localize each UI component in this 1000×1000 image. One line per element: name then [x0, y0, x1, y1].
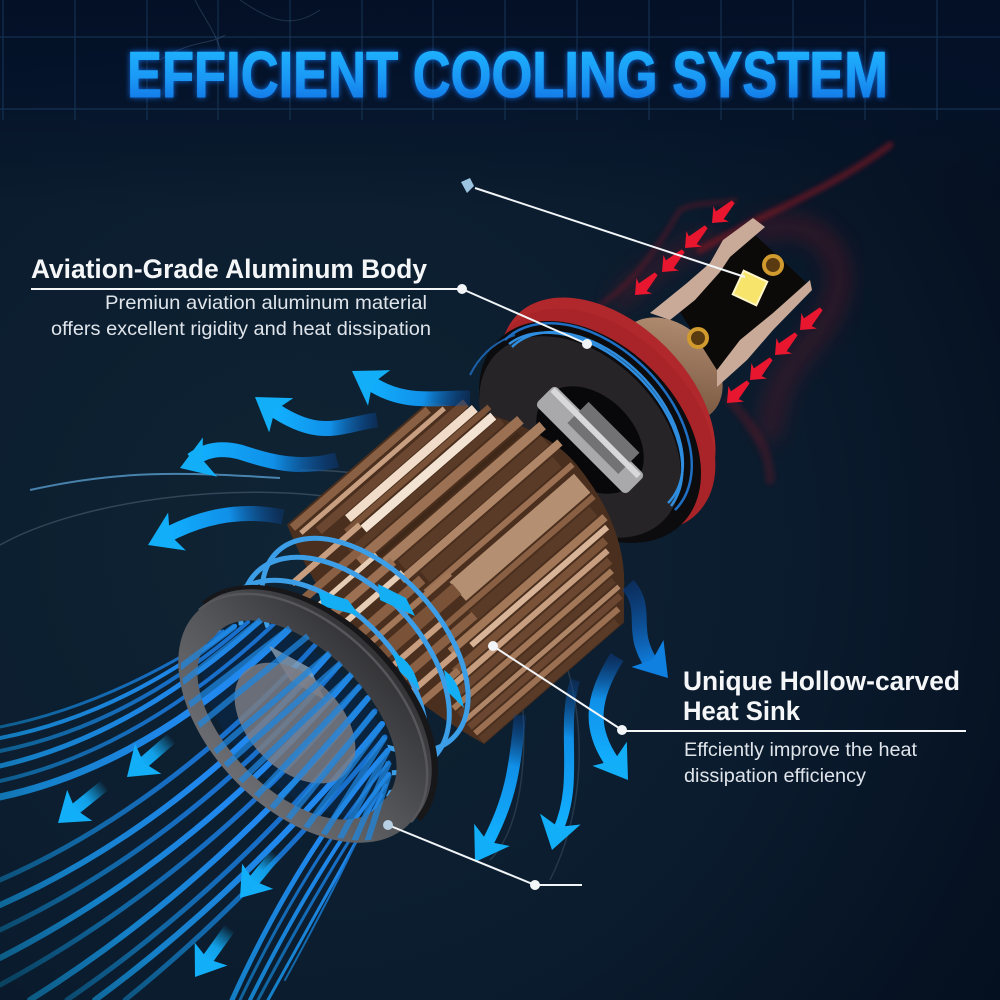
airflow stripes over ring and hub [180, 618, 392, 840]
airflow streaks [0, 620, 389, 1000]
callout: unique hollow-carved heat sink: Heat Sink [683, 696, 800, 726]
callout: aviation-grade aluminum body: Premiun aviation aluminum material [105, 292, 427, 314]
gold hole bottom [689, 329, 707, 347]
inner airflow arrows [318, 584, 464, 708]
callout: unique hollow-carved heat sink: Unique Hollow-carved [683, 666, 960, 696]
upper leg [650, 218, 765, 320]
callout: aviation-grade aluminum body: offers excellent rigidity and heat dissipation [51, 318, 431, 340]
gold hole top [764, 256, 782, 274]
red heat smoke [600, 145, 890, 480]
lower leg [717, 280, 812, 387]
fan hub [212, 640, 378, 806]
red arrows [627, 194, 829, 411]
led chip [733, 271, 767, 305]
callout: unique hollow-carved heat sink: dissipation efficiency [684, 766, 867, 787]
hole backdrop [168, 591, 426, 849]
red socket ring [450, 257, 758, 574]
bulb head: led board and legs [596, 218, 812, 444]
lower-left arrow tails [68, 738, 276, 967]
heat sink [254, 354, 677, 776]
black socket face [436, 278, 744, 586]
blue airflow rings [178, 500, 507, 835]
callout: aviation-grade aluminum body [31, 254, 462, 340]
callout: unique hollow-carved heat sink: Effciently improve the heat [684, 740, 918, 761]
near-end fin teeth [283, 499, 504, 724]
callout: aviation-grade aluminum body: Aviation-Grade Aluminum Body [31, 254, 427, 284]
callout: unique hollow-carved heat sink [622, 666, 966, 787]
leader lines [383, 178, 745, 890]
blue airflow arrows [45, 353, 684, 988]
connector plug [515, 365, 665, 515]
front bezel ring [178, 589, 433, 843]
